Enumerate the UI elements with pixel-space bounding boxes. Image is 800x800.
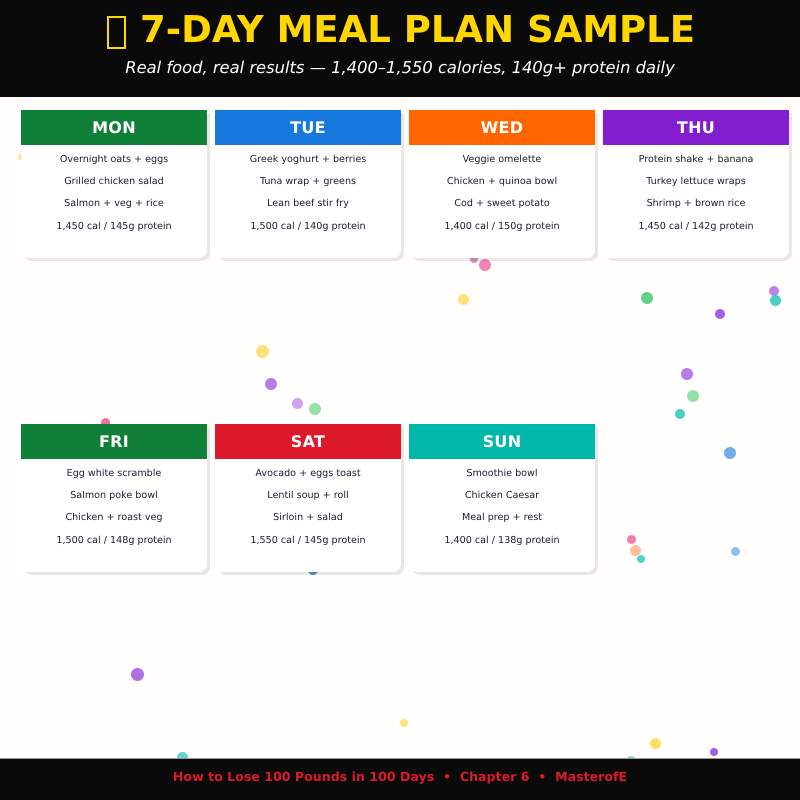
panel: Saturday: SAT bbox=[291, 432, 325, 451]
panel: Tuesday: Greek yoghurt + berries bbox=[250, 154, 366, 165]
panel: Sunday: SUN bbox=[483, 432, 521, 451]
panel: Monday: Salmon + veg + rice bbox=[64, 198, 164, 209]
panel: Monday: MON bbox=[92, 118, 136, 137]
panel: Saturday: Lentil soup + roll bbox=[267, 490, 349, 501]
panel: Thursday: Protein shake + banana bbox=[639, 154, 753, 165]
header banner bbox=[0, 0, 800, 97]
panel: Wednesday: WED bbox=[481, 118, 523, 137]
panel: Monday: 1,450 cal / 145g protein bbox=[56, 221, 172, 232]
panel: Wednesday: Chicken + quinoa bowl bbox=[447, 176, 557, 187]
panel: Saturday bbox=[215, 424, 401, 572]
panel: Wednesday: Cod + sweet potato bbox=[454, 198, 550, 209]
panel: Thursday: 1,450 cal / 142g protein bbox=[638, 221, 754, 232]
panel: Tuesday: Tuna wrap + greens bbox=[260, 176, 356, 187]
title: 7-DAY MEAL PLAN SAMPLE bbox=[140, 8, 695, 51]
panel: Saturday: 1,550 cal / 145g protein bbox=[250, 535, 366, 546]
panel: Wednesday: Veggie omelette bbox=[463, 154, 541, 165]
panel: Friday: 1,500 cal / 148g protein bbox=[56, 535, 172, 546]
panel: Wednesday: 1,400 cal / 150g protein bbox=[444, 221, 560, 232]
panel: Tuesday bbox=[215, 110, 401, 258]
panel: Tuesday: 1,500 cal / 140g protein bbox=[250, 221, 366, 232]
panel: Friday: Egg white scramble bbox=[67, 468, 161, 479]
panel: Friday bbox=[21, 424, 207, 572]
panel: Thursday: Shrimp + brown rice bbox=[647, 198, 745, 209]
panel: Friday: FRI bbox=[99, 432, 129, 451]
panel: Thursday bbox=[603, 110, 789, 258]
panel: Sunday: Chicken Caesar bbox=[465, 490, 539, 501]
subtitle: Real food, real results — 1,400–1,550 calories, 140g+ protein daily bbox=[125, 58, 675, 77]
panel: Monday: Overnight oats + eggs bbox=[60, 154, 168, 165]
panel: Thursday: THU bbox=[677, 118, 715, 137]
panel: Monday bbox=[21, 110, 207, 258]
panel: Wednesday bbox=[409, 110, 595, 258]
footer: How to Lose 100 Pounds in 100 Days • Chapter 6 • MasterofE bbox=[173, 769, 627, 784]
panel: Thursday: Turkey lettuce wraps bbox=[646, 176, 746, 187]
panel: Sunday: Smoothie bowl bbox=[466, 468, 538, 479]
panel: Monday: Grilled chicken salad bbox=[64, 176, 164, 187]
panel: Saturday: Sirloin + salad bbox=[273, 512, 343, 523]
panel: Tuesday: Lean beef stir fry bbox=[267, 198, 349, 209]
panel: Saturday: Avocado + eggs toast bbox=[255, 468, 361, 479]
panel: Friday: Salmon poke bowl bbox=[70, 490, 158, 501]
panel: Sunday: Meal prep + rest bbox=[462, 512, 542, 523]
panel: Sunday bbox=[409, 424, 595, 572]
footer bbox=[0, 758, 800, 800]
panel: Sunday: 1,400 cal / 138g protein bbox=[444, 535, 560, 546]
panel: Tuesday: TUE bbox=[290, 118, 326, 137]
panel: Friday: Chicken + roast veg bbox=[65, 512, 162, 523]
